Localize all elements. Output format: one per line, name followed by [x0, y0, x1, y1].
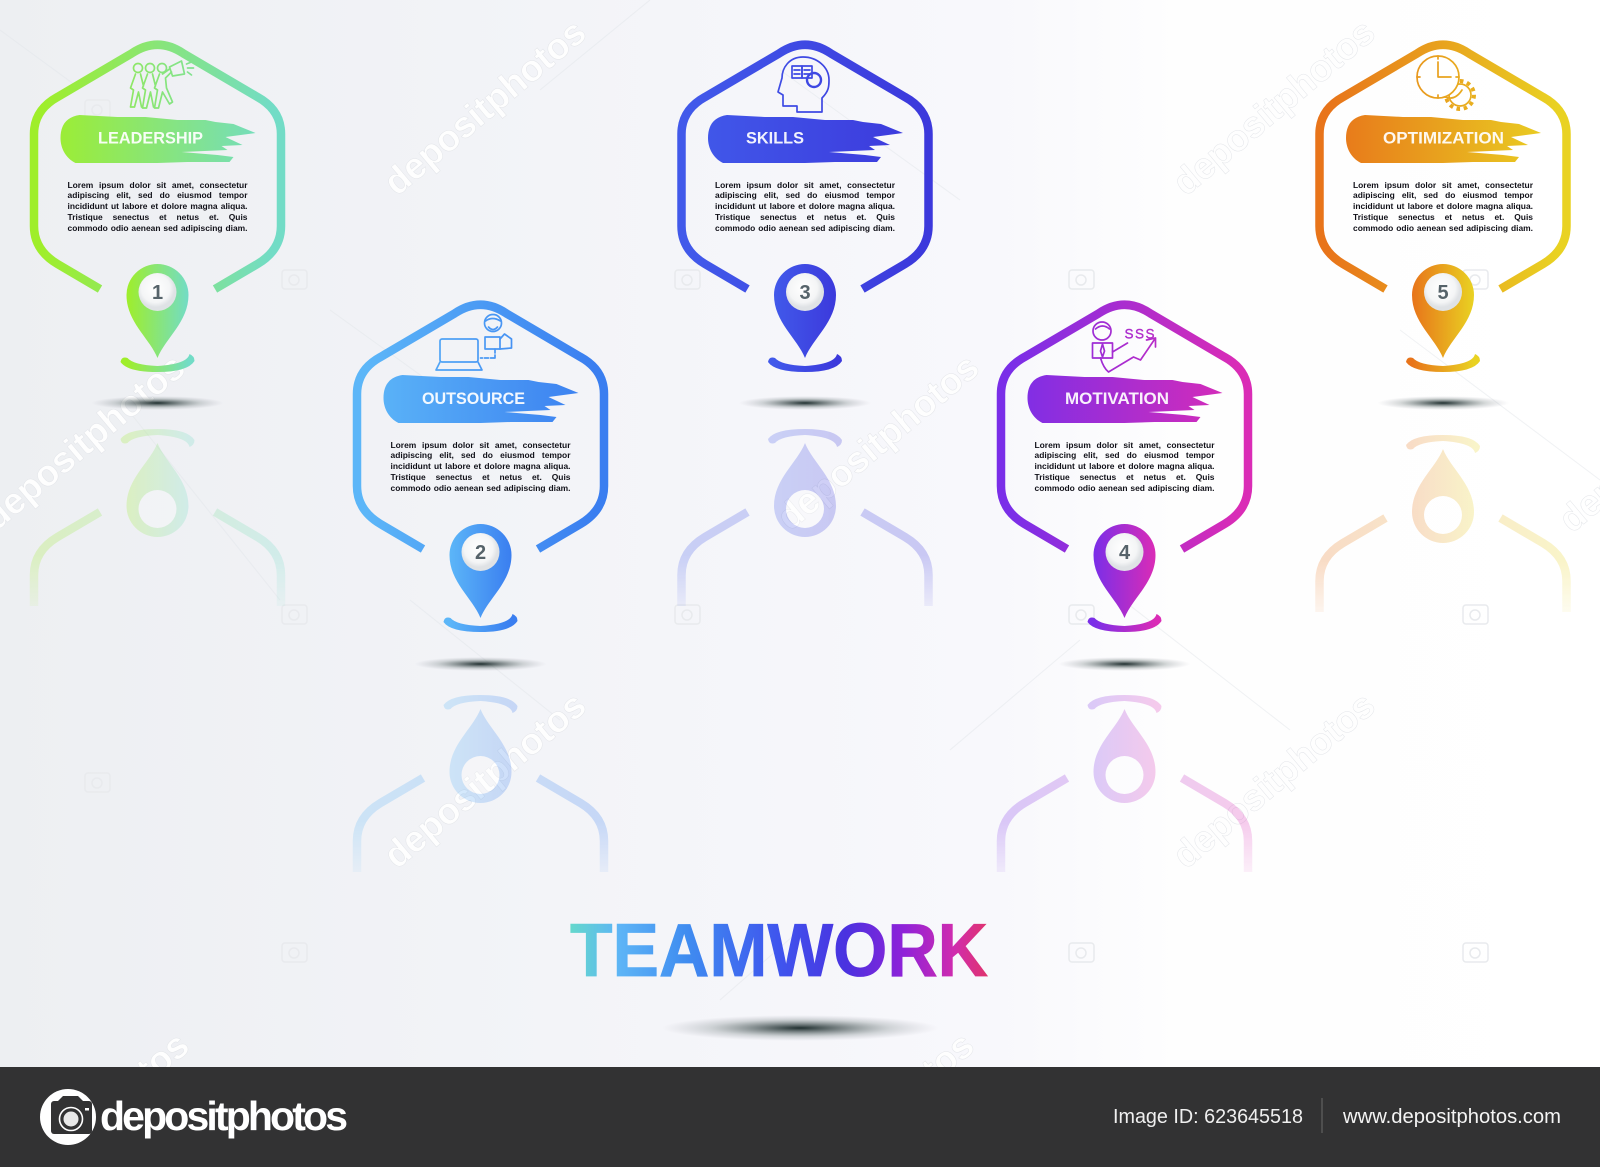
map pin 3 — [768, 264, 842, 372]
text block: incididunt ut labore et dolore magna aliqua. — [390, 461, 570, 471]
pin shadow — [1058, 657, 1190, 671]
watermark pattern: depositphotos — [376, 11, 594, 203]
hexagon frame — [682, 45, 928, 289]
text block: adipiscing elit, sed do eiusmod tempor — [68, 190, 248, 200]
text block: adipiscing elit, sed do eiusmod tempor — [715, 190, 895, 200]
map pin 3: 3 — [799, 282, 811, 304]
text block: adipiscing elit, sed do eiusmod tempor — [1034, 450, 1214, 460]
map pin 4: 4 — [1119, 542, 1131, 564]
banner: leadership: LEADERSHIP — [98, 128, 203, 148]
text block: Tristique senectus et netus et. Quis — [390, 472, 570, 482]
reflection: 2 outsource — [357, 695, 604, 872]
icon: businessman with rising arrow — [1092, 322, 1156, 372]
text block: commodo odio aenean sed adipiscing diam. — [390, 483, 570, 493]
text block: commodo odio aenean sed adipiscing diam. — [68, 223, 248, 233]
banner: leadership — [60, 115, 256, 163]
panel: 3 skills — [682, 45, 928, 606]
website url: www.depositphotos.com — [1342, 1106, 1561, 1128]
footer bar — [0, 1067, 1600, 1167]
title shadow — [662, 1015, 938, 1041]
reflection: 1 leadership — [34, 429, 281, 606]
logo icon: camera — [40, 1089, 96, 1145]
text block: adipiscing elit, sed do eiusmod tempor — [1353, 190, 1533, 200]
text block — [68, 180, 250, 240]
panel: 4 motivation — [1001, 305, 1248, 872]
text block: Tristique senectus et netus et. Quis — [715, 212, 895, 222]
text block: incididunt ut labore et dolore magna aliqua. — [1353, 201, 1533, 211]
text block: Lorem ipsum dolor sit amet, consectetur — [68, 180, 248, 190]
text block: adipiscing elit, sed do eiusmod tempor — [390, 450, 570, 460]
banner: skills: SKILLS — [746, 128, 804, 148]
icon label: money: SSS — [1124, 326, 1154, 342]
map pin 2: 2 — [475, 542, 486, 564]
watermark pattern: depositphotos — [376, 684, 594, 876]
reflection: 5 optimization — [1320, 435, 1566, 612]
pin shadow — [1377, 396, 1509, 410]
pin shadow — [92, 396, 224, 410]
title: TEAMWORK — [570, 908, 988, 992]
banner: outsource — [384, 375, 578, 423]
text block: commodo odio aenean sed adipiscing diam. — [1353, 223, 1533, 233]
watermark pattern: depositphotos — [769, 346, 987, 538]
text block: Tristique senectus et netus et. Quis — [1034, 472, 1214, 482]
panel: 2 outsource — [357, 305, 604, 872]
text block — [1034, 440, 1216, 500]
hexagon frame — [357, 305, 604, 549]
map pin 4 — [1088, 524, 1162, 632]
icon: laptop and remote worker — [436, 314, 512, 370]
hexagon frame — [1320, 45, 1566, 289]
banner: motivation: MOTIVATION — [1065, 389, 1169, 408]
pin shadow — [739, 396, 871, 410]
reflection: 4 motivation — [1001, 695, 1248, 872]
text block — [715, 180, 897, 240]
banner: motivation — [1028, 375, 1222, 423]
text block: incididunt ut labore et dolore magna aliqua. — [1034, 461, 1214, 471]
map pin 5: 5 — [1437, 282, 1449, 304]
icon: clock and gear — [1417, 56, 1474, 109]
hexagon frame — [1001, 305, 1248, 549]
watermark pattern: depositphotos — [1165, 11, 1383, 203]
text block — [1353, 180, 1535, 240]
map pin 5 — [1406, 264, 1480, 372]
text block: incididunt ut labore et dolore magna aliqua. — [68, 201, 248, 211]
icon: team with megaphone — [130, 61, 194, 108]
text block: commodo odio aenean sed adipiscing diam. — [715, 223, 895, 233]
banner: skills — [708, 115, 903, 163]
map pin 2 — [444, 524, 518, 632]
panel: 5 optimization — [1320, 45, 1566, 612]
icon: head with book and gear — [778, 57, 829, 112]
text block: Lorem ipsum dolor sit amet, consectetur — [390, 440, 570, 450]
text block: Lorem ipsum dolor sit amet, consectetur — [1353, 180, 1533, 190]
text block: Tristique senectus et netus et. Quis — [1353, 212, 1533, 222]
image id: Image ID: 623645518 — [1113, 1106, 1303, 1128]
text block: commodo odio aenean sed adipiscing diam. — [1034, 483, 1214, 493]
banner: outsource: OUTSOURCE — [422, 389, 525, 408]
hexagon frame — [34, 45, 281, 289]
text block: Lorem ipsum dolor sit amet, consectetur — [1034, 440, 1214, 450]
pin shadow — [414, 657, 546, 671]
text block: incididunt ut labore et dolore magna aliqua. — [715, 201, 895, 211]
banner: optimization — [1346, 115, 1541, 163]
text block — [390, 440, 572, 500]
footer divider — [1322, 1098, 1323, 1133]
reflection: 3 skills — [682, 429, 928, 606]
watermark pattern: depositphotos — [1165, 684, 1383, 876]
text block: Lorem ipsum dolor sit amet, consectetur — [715, 180, 895, 190]
banner: optimization: OPTIMIZATION — [1383, 128, 1504, 148]
map pin 1: 1 — [152, 282, 163, 304]
logo wordmark: depositphotos — [100, 1093, 348, 1139]
map pin 1 — [120, 264, 194, 372]
panel: 1 leadership — [34, 45, 281, 606]
text block: Tristique senectus et netus et. Quis — [68, 212, 248, 222]
